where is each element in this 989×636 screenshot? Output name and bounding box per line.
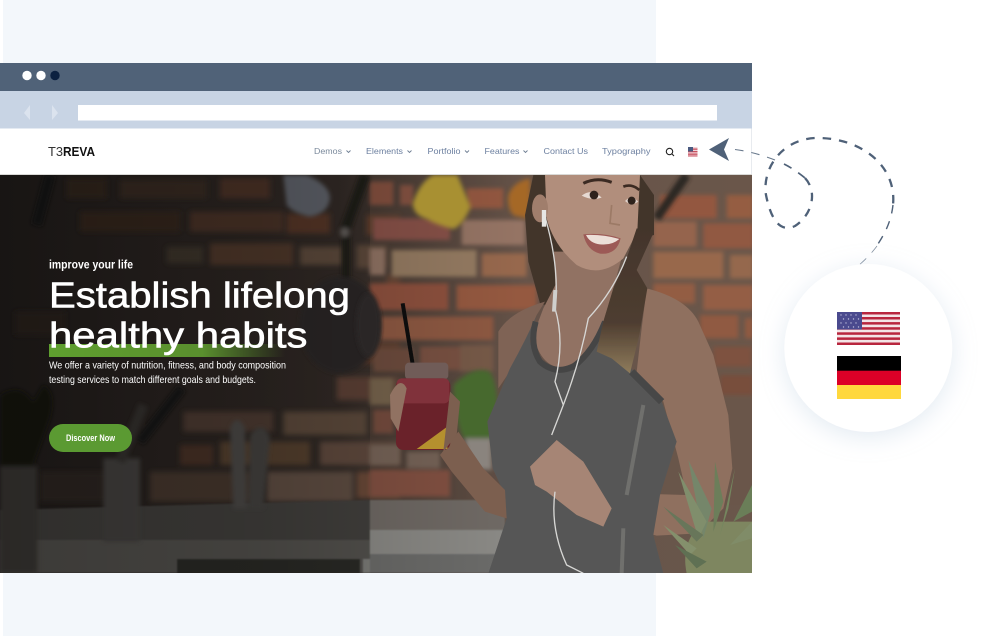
left shoulder bbox=[498, 302, 545, 388]
language selector circle bbox=[784, 264, 952, 432]
kitchen counter bbox=[0, 500, 505, 573]
hero photo bbox=[0, 175, 753, 573]
hero heading bbox=[49, 274, 350, 356]
icon: German flag bbox=[837, 356, 901, 399]
plant bbox=[453, 370, 497, 470]
left forearm bbox=[440, 432, 507, 518]
tank top bbox=[487, 308, 677, 573]
button: Discover Now bbox=[49, 424, 132, 452]
browser window bbox=[0, 63, 753, 573]
navigation menu: Demos bbox=[314, 146, 342, 156]
neck and chest bbox=[533, 252, 623, 368]
icon: cursor arrow bbox=[709, 138, 729, 161]
logo: REVA bbox=[63, 145, 95, 159]
right arm bbox=[600, 288, 732, 536]
logo bbox=[48, 145, 95, 159]
dark overlay on the left bbox=[0, 175, 446, 573]
long hair lock over the shoulder bbox=[597, 228, 654, 373]
background panel bbox=[3, 0, 656, 636]
hero paragraph: We offer a variety of nutrition, fitness, and body composition bbox=[49, 360, 286, 372]
hero heading: Establish lifelong bbox=[49, 274, 350, 316]
browser address bar bbox=[0, 91, 752, 128]
navigation menu: Contact Us bbox=[544, 146, 588, 156]
navigation menu: Elements bbox=[366, 146, 403, 156]
hero paragraph: testing services to match different goals and budgets. bbox=[49, 374, 256, 386]
hair bbox=[525, 175, 654, 308]
icon: search bbox=[666, 148, 674, 156]
browser title bar bbox=[0, 63, 752, 91]
brick wall and kitchen background bbox=[0, 175, 753, 573]
navigation menu bbox=[314, 146, 651, 156]
hero eyebrow: improve your life bbox=[49, 260, 133, 272]
hero heading: healthy habits bbox=[49, 314, 308, 356]
dashed flight path bbox=[735, 138, 893, 266]
face bbox=[545, 175, 640, 270]
earphone wires bbox=[544, 210, 627, 573]
hanging kitchen utensils bbox=[0, 175, 381, 573]
hanging mugs bbox=[356, 175, 687, 357]
pineapple bbox=[663, 460, 752, 573]
icon: small US flag bbox=[688, 147, 698, 156]
website navigation bar bbox=[0, 128, 752, 175]
eyes, brows and mouth bbox=[583, 180, 612, 183]
hand on wire bbox=[530, 440, 612, 527]
juice jar and straw bbox=[390, 303, 460, 452]
icon: US flag bbox=[837, 312, 900, 345]
button: Discover Now: Discover Now bbox=[66, 433, 115, 444]
navigation menu: Typography bbox=[602, 146, 651, 156]
hero highlight bar bbox=[49, 344, 285, 357]
hero paragraph bbox=[49, 360, 286, 386]
logo: T3 bbox=[48, 145, 63, 159]
navigation menu: Portfolio bbox=[428, 146, 461, 156]
woman bbox=[440, 175, 732, 573]
navigation menu: Features bbox=[484, 146, 520, 156]
